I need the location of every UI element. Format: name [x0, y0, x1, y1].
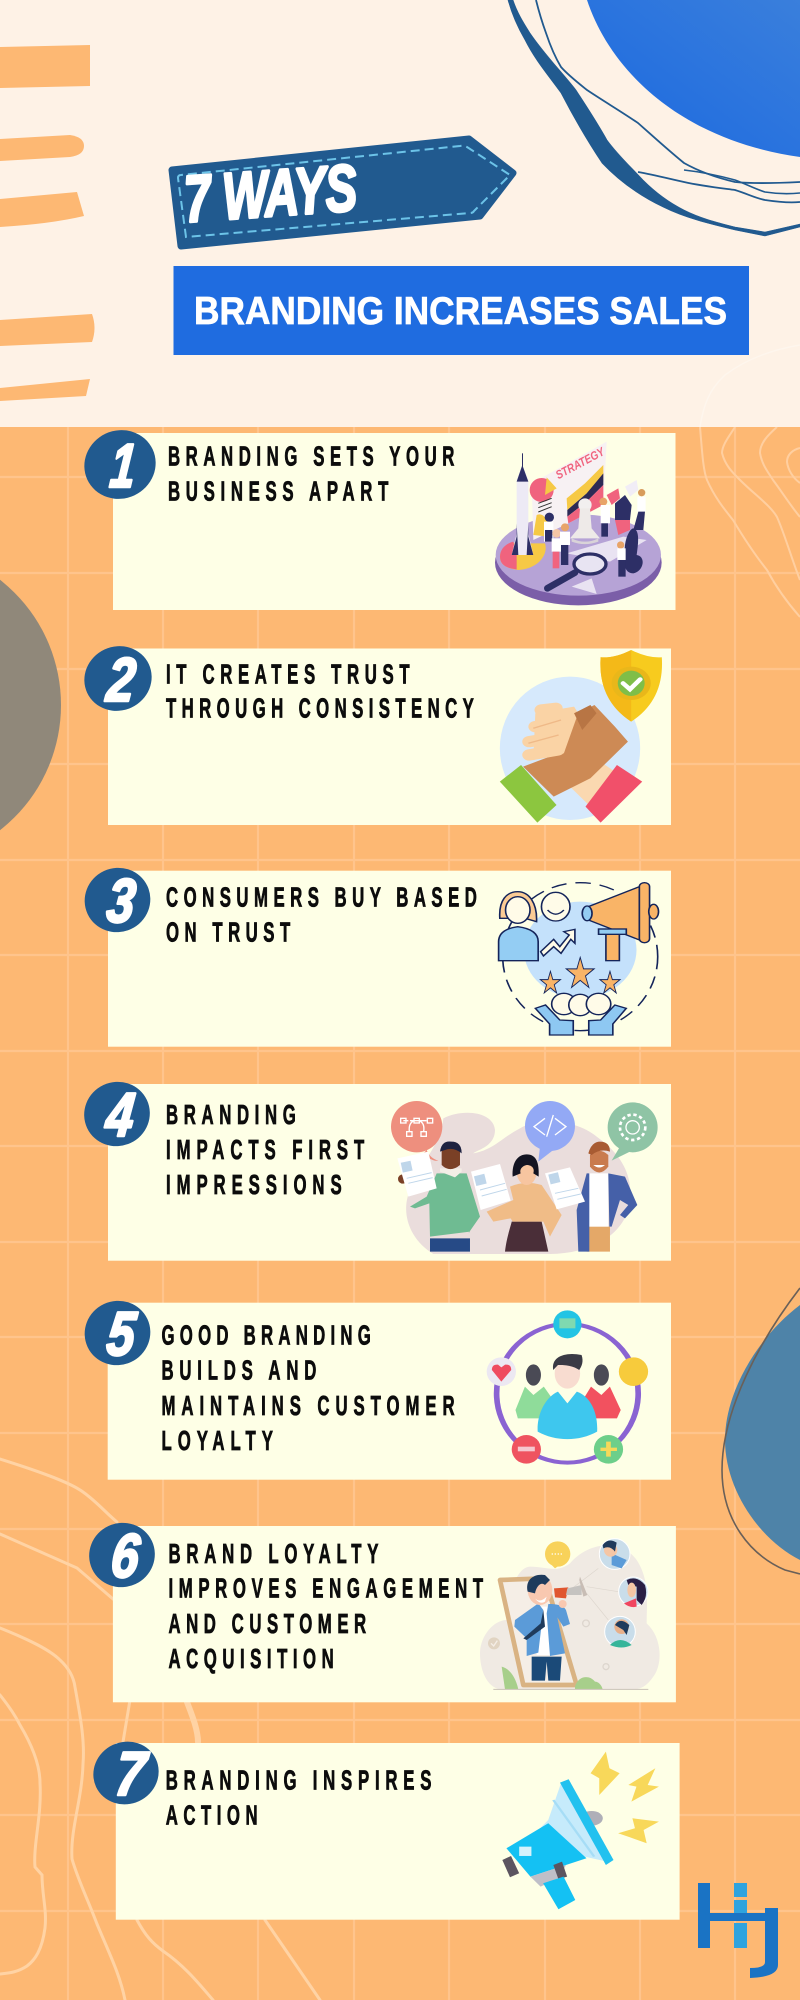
illustration: strategy platform: STRATEGY	[553, 444, 608, 482]
number badge 7: 7	[112, 1740, 152, 1809]
text: way 5: GOOD BRANDING	[162, 1319, 371, 1351]
panel: way 4	[74, 1071, 671, 1261]
number badge 1: 1	[107, 432, 139, 501]
navy swoosh lines	[508, 0, 800, 236]
number badge 3	[74, 857, 161, 943]
number badge 6: 6	[108, 1521, 144, 1590]
grey circle decoration	[0, 546, 61, 864]
blue circle decoration	[587, 0, 800, 157]
number badge 3: 3	[104, 866, 139, 935]
contour lines bottom left	[0, 1459, 320, 2000]
number badge 5: 5	[104, 1299, 140, 1368]
illustration: strategy platform	[495, 442, 662, 605]
logo: HJ	[698, 1883, 778, 1978]
text: way 1: BRANDING SETS YOUR	[168, 440, 454, 472]
number badge 1	[73, 418, 167, 511]
banner: branding increases sales: BRANDING INCREASES SALES	[194, 290, 727, 333]
number badge 6	[79, 1512, 165, 1598]
illustration: three people with resumes	[391, 1101, 658, 1254]
panel: way 1	[73, 418, 675, 610]
illustration: blue megaphone with lightning bolts	[502, 1752, 659, 1909]
panel: way 5	[74, 1290, 671, 1480]
blue blob decoration	[722, 1288, 800, 1574]
text: way 2: THROUGH CONSISTENCY	[166, 692, 474, 723]
text: way 2	[166, 658, 474, 723]
text: way 6: IMPROVES ENGAGEMENT	[168, 1572, 483, 1603]
text: way 6: AND CUSTOMER	[168, 1608, 366, 1639]
text: way 3	[166, 881, 477, 947]
illustration: man with megaphone in phone	[480, 1539, 660, 1689]
panel: way 7	[83, 1731, 680, 1920]
panel: way 2	[74, 635, 671, 825]
panel: cream header	[0, 0, 800, 427]
orange brush strokes	[0, 45, 94, 401]
text: way 7: BRANDING INSPIRES	[166, 1764, 431, 1796]
panel: orange background	[0, 427, 800, 2000]
illustration: megaphone, stars and people	[499, 883, 659, 1035]
text: way 4: BRANDING	[166, 1099, 296, 1130]
text: way 1	[168, 440, 454, 507]
heading: 7 ways: 7 WAYS	[182, 152, 359, 237]
text: way 5: MAINTAINS CUSTOMER	[162, 1390, 455, 1421]
text: way 4: IMPACTS FIRST	[166, 1134, 364, 1165]
text: way 5: BUILDS AND	[162, 1354, 316, 1386]
text: way 7	[166, 1764, 431, 1831]
banner: branding increases sales	[174, 266, 749, 355]
text: way 3: CONSUMERS BUY BASED	[166, 881, 477, 912]
number badge 5	[74, 1290, 161, 1376]
text: way 2: IT CREATES TRUST	[166, 658, 410, 689]
contour lines top right	[700, 427, 800, 617]
text: way 4	[166, 1099, 364, 1200]
text: way 6	[168, 1538, 483, 1674]
number badge 2: 2	[103, 645, 139, 714]
panel: way 3	[74, 857, 671, 1047]
number badge 4: 4	[102, 1080, 138, 1149]
tag: 7 ways	[172, 139, 513, 246]
text: way 3: ON TRUST	[166, 916, 290, 947]
number badge 2	[74, 635, 162, 722]
text: way 5: LOYALTY	[162, 1425, 273, 1456]
illustration: customer loyalty ring	[487, 1310, 648, 1464]
number badge 4	[74, 1071, 160, 1157]
number badge 7	[83, 1731, 169, 1815]
text: way 6: ACQUISITION	[168, 1643, 334, 1674]
illustration: handshake and shield	[500, 650, 662, 823]
text: way 7: ACTION	[166, 1799, 258, 1831]
text: way 5	[162, 1319, 455, 1456]
text: way 1: BUSINESS APART	[168, 475, 388, 507]
text: way 4: IMPRESSIONS	[166, 1169, 342, 1200]
panel: way 6	[79, 1512, 676, 1702]
text: way 6: BRAND LOYALTY	[168, 1538, 378, 1569]
